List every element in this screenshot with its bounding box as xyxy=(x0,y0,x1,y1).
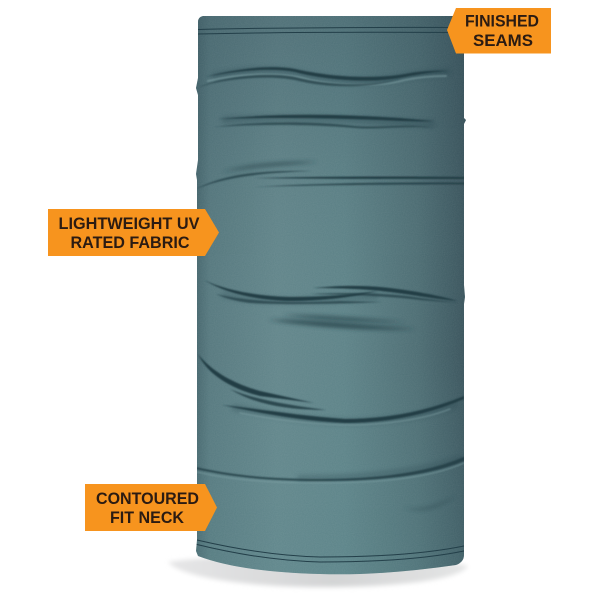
contoured neck seam stitching xyxy=(197,540,464,562)
fabric fold 6 xyxy=(198,354,464,425)
top finished seam stitching xyxy=(198,27,464,34)
callout: lightweight UV rated fabric xyxy=(48,209,219,256)
callout: contoured fit neck: CONTOURED xyxy=(96,489,199,508)
callout: contoured fit neck xyxy=(85,484,217,531)
fabric fold 1 xyxy=(198,67,449,88)
fabric fold 3 xyxy=(196,162,466,189)
callout: lightweight UV rated fabric: LIGHTWEIGHT UV xyxy=(58,214,200,233)
fabric fold 7 xyxy=(196,456,466,510)
fabric fold 4 xyxy=(204,280,458,304)
callout: finished seams: FINISHED xyxy=(465,12,539,31)
fabric fold 2 xyxy=(214,115,434,128)
ground shadow xyxy=(168,556,468,587)
fabric fold 5 xyxy=(268,315,416,329)
callout: lightweight UV rated fabric: RATED FABRIC xyxy=(70,233,190,252)
callout: finished seams: SEAMS xyxy=(473,31,533,50)
callout: contoured fit neck: FIT NECK xyxy=(110,508,185,527)
callout: finished seams xyxy=(447,8,551,54)
neck gaiter tube xyxy=(190,10,470,580)
